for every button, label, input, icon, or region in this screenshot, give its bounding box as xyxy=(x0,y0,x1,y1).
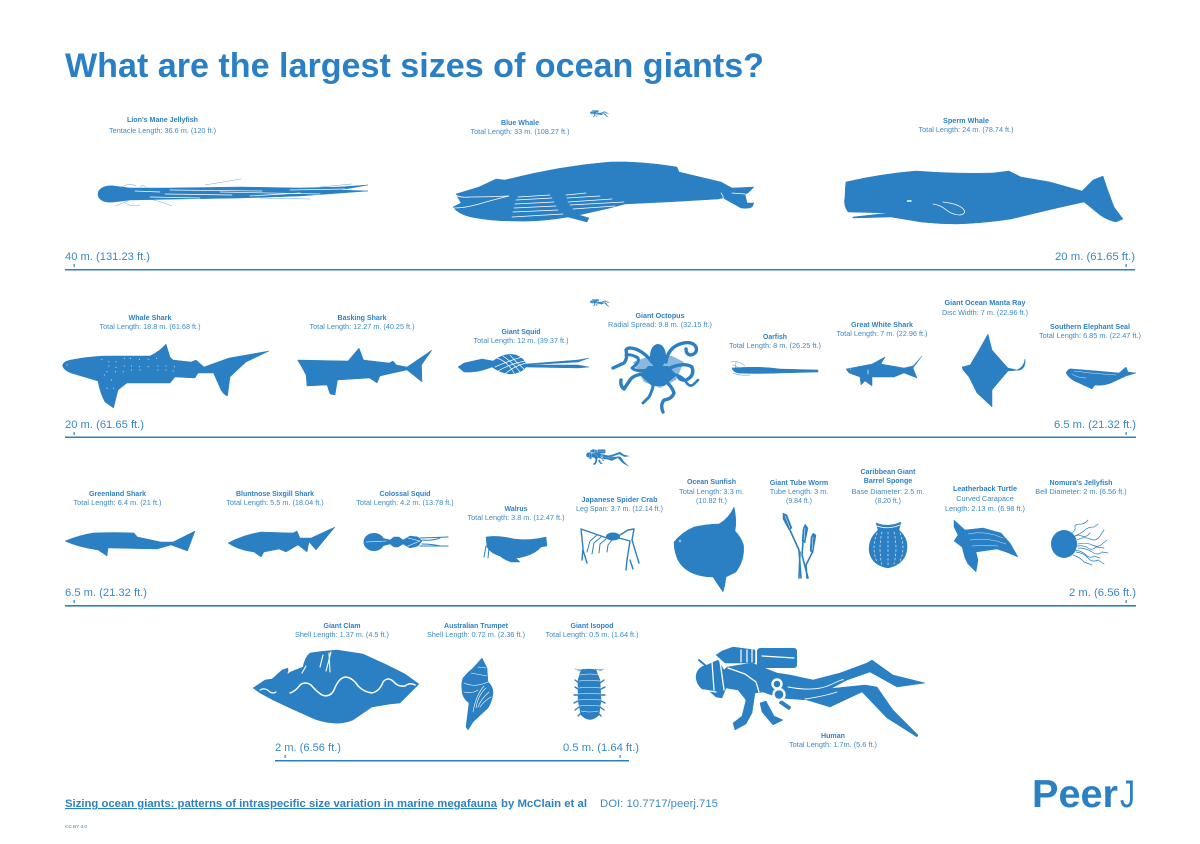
icon: australian trumpet shell xyxy=(462,658,493,730)
citation xyxy=(65,798,718,810)
icon: barrel sponge xyxy=(869,522,907,568)
icon: small diver scale, row 1 xyxy=(590,110,609,118)
label: Walrus xyxy=(504,504,528,513)
label xyxy=(474,327,568,345)
panel: Blue Whale xyxy=(453,118,754,222)
label: Total Length: 0.5 m. (1.64 ft.) xyxy=(546,630,638,639)
label xyxy=(226,489,324,507)
panel: row 2 scale bar xyxy=(65,419,1136,438)
label: Total Length: 5.5 m. (18.04 ft.) xyxy=(226,498,324,507)
panel: row 3 scale bar xyxy=(65,587,1136,607)
panel: Giant Isopod xyxy=(546,621,638,720)
panel: Whale Shark xyxy=(62,313,269,408)
panel: Caribbean Giant Barrel Sponge xyxy=(852,467,924,568)
label: Total Length: 4.2 m. (13.78 ft.) xyxy=(356,498,454,507)
label xyxy=(1035,478,1127,496)
title: What are the largest sizes of ocean giants? xyxy=(65,47,764,85)
label: Giant Ocean Manta Ray xyxy=(944,298,1026,307)
icon: giant isopod xyxy=(574,669,605,720)
icon: blue whale xyxy=(453,162,754,222)
label: Total Length: 6.85 m. (22.47 ft.) xyxy=(1039,331,1141,340)
panel: Leatherback Turtle xyxy=(945,484,1025,572)
label: Radial Spread: 9.8 m. (32.15 ft.) xyxy=(608,320,712,329)
icon: giant squid xyxy=(458,354,589,374)
label xyxy=(679,477,744,505)
label xyxy=(852,467,924,505)
label: Shell Length: 0.72 m. (2.36 ft.) xyxy=(427,630,525,639)
scale rule xyxy=(275,755,629,762)
label: Barrel Sponge xyxy=(864,476,912,485)
label: Total Length: 8 m. (26.25 ft.) xyxy=(729,341,821,350)
license note: CC BY 4.0 xyxy=(65,824,88,829)
label xyxy=(942,298,1028,317)
scale label: 20 m: 20 m. (61.65 ft.) xyxy=(1055,251,1135,263)
label xyxy=(295,621,389,639)
icon: manta ray xyxy=(962,334,1025,407)
label: Giant Tube Worm xyxy=(770,478,828,487)
citation: DOI: 10.7717/peerj.715 xyxy=(600,798,718,810)
label: Basking Shark xyxy=(338,313,386,322)
label: Giant Octopus xyxy=(636,311,684,320)
panel: Nomura's Jellyfish xyxy=(1035,478,1127,565)
label: Giant Squid xyxy=(502,327,540,336)
citation: Sizing ocean giants: patterns of intraspecific size variation in marine megafauna xyxy=(65,798,498,810)
label: Sperm Whale xyxy=(943,116,989,125)
label: Colossal Squid xyxy=(380,489,430,498)
logo: PeerJ: J xyxy=(1120,773,1135,816)
label xyxy=(74,489,162,507)
icon: leatherback turtle xyxy=(954,520,1018,572)
label: Giant Isopod xyxy=(570,621,614,630)
label: Base Diameter: 2.5 m. xyxy=(852,487,924,496)
panel: Oarfish xyxy=(729,332,821,375)
icon: lion's mane jellyfish xyxy=(98,179,368,206)
logo: PeerJ: Peer xyxy=(1032,773,1118,816)
label: Total Length: 12.27 m. (40.25 ft.) xyxy=(310,322,414,331)
label xyxy=(945,484,1025,513)
label: (8.20 ft.) xyxy=(875,496,901,505)
panel: Human diver xyxy=(696,647,925,749)
scale label: 40 m: 40 m. (131.23 ft.) xyxy=(65,251,150,263)
label: Blue Whale xyxy=(501,118,539,127)
icon: ocean sunfish xyxy=(674,507,744,592)
scale rule xyxy=(65,264,1135,270)
citation: by McClain et al xyxy=(501,798,587,810)
scale label: 6.5 m: 6.5 m. (21.32 ft.) xyxy=(65,587,147,599)
icon: great white shark xyxy=(846,356,922,386)
label xyxy=(109,115,216,135)
icon: elephant seal xyxy=(1066,367,1136,389)
label: Total Length: 1.7m. (5.6 ft.) xyxy=(789,740,877,749)
label: Leg Span: 3.7 m. (12.14 ft.) xyxy=(576,504,663,513)
label: Shell Length: 1.37 m. (4.5 ft.) xyxy=(295,630,389,639)
label xyxy=(608,311,712,329)
panel: Giant Ocean Manta Ray xyxy=(942,298,1028,407)
label: Great White Shark xyxy=(851,320,913,329)
scale label: 20 m: 20 m. (61.65 ft.) xyxy=(65,419,144,431)
icon: walrus xyxy=(484,536,547,562)
panel: Giant Tube Worm xyxy=(770,478,828,578)
label: Total Length: 24 m. (78.74 ft.) xyxy=(918,125,1014,134)
panel: Giant Clam xyxy=(253,621,419,723)
label: Bluntnose Sixgill Shark xyxy=(236,489,314,498)
icon: whale shark xyxy=(62,344,269,408)
scale label: 2 m: 2 m. (6.56 ft.) xyxy=(1069,587,1136,599)
label: Total Length: 3.8 m. (12.47 ft.) xyxy=(468,513,564,522)
panel: row 4 scale bar xyxy=(275,742,639,762)
label xyxy=(918,116,1014,134)
label: Giant Clam xyxy=(324,621,360,630)
scale label: 0.5 m: 0.5 m. (1.64 ft.) xyxy=(563,742,639,754)
label: Total Length: 18.8 m. (61.68 ft.) xyxy=(100,322,200,331)
icon: nomura's jellyfish xyxy=(1051,520,1108,565)
label xyxy=(729,332,821,350)
label: Leatherback Turtle xyxy=(953,484,1017,493)
panel: row 1 scale bar xyxy=(65,251,1135,270)
panel: Ocean Sunfish xyxy=(674,477,744,592)
label: Total Length: 7 m. (22.96 ft.) xyxy=(836,329,928,338)
panel: Giant Octopus xyxy=(608,311,712,412)
panel: Greenland Shark xyxy=(65,489,195,556)
label: Australian Trumpet xyxy=(444,621,509,630)
label: Total Length: 6.4 m. (21 ft.) xyxy=(74,498,162,507)
icon: greenland shark xyxy=(65,531,195,556)
icon: scuba diver xyxy=(696,647,925,737)
icon: sperm whale xyxy=(844,171,1123,224)
label: Nomura's Jellyfish xyxy=(1050,478,1112,487)
label xyxy=(789,731,877,749)
label: Tentacle Length: 36.6 m. (120 ft.) xyxy=(109,126,216,135)
label: (10.82 ft.) xyxy=(696,496,727,505)
icon: spider crab xyxy=(581,529,639,570)
label: Oarfish xyxy=(763,332,787,341)
icon: tube worms xyxy=(783,513,816,578)
label: Total Length: 33 m. (108.27 ft.) xyxy=(470,127,570,136)
label: Length: 2.13 m. (6.98 ft.) xyxy=(945,504,1025,513)
label: Ocean Sunfish xyxy=(687,477,736,486)
label: Total Length: 3.3 m. xyxy=(679,487,744,496)
label xyxy=(310,313,414,331)
panel: Giant Squid xyxy=(458,327,589,374)
panel: Australian Trumpet xyxy=(427,621,525,730)
label: Whale Shark xyxy=(128,313,172,322)
label xyxy=(100,313,200,331)
label xyxy=(356,489,454,507)
icon: basking shark xyxy=(298,348,432,395)
label: Greenland Shark xyxy=(89,489,146,498)
label: Southern Elephant Seal xyxy=(1050,322,1130,331)
label xyxy=(770,478,828,505)
icon: colossal squid xyxy=(364,533,448,551)
label xyxy=(470,118,570,136)
label xyxy=(546,621,638,639)
label: Tube Length: 3 m. xyxy=(770,487,828,496)
label: Caribbean Giant xyxy=(860,467,916,476)
label xyxy=(836,320,928,338)
panel: Japanese Spider Crab xyxy=(576,495,663,570)
scale label: 6.5 m: 6.5 m. (21.32 ft.) xyxy=(1054,419,1136,431)
label: Disc Width: 7 m. (22.96 ft.) xyxy=(942,308,1028,317)
label: Curved Carapace xyxy=(956,494,1014,503)
label: Bell Diameter: 2 m. (6.56 ft.) xyxy=(1035,487,1127,496)
label xyxy=(427,621,525,639)
panel: Southern Elephant Seal xyxy=(1039,322,1141,389)
icon: giant clam xyxy=(253,650,419,723)
label xyxy=(468,504,564,522)
icon: sixgill shark xyxy=(228,527,335,557)
label: Human xyxy=(821,731,845,740)
scale label: 2 m: 2 m. (6.56 ft.) xyxy=(275,742,341,754)
panel: Bluntnose Sixgill Shark xyxy=(226,489,335,557)
panel: Walrus xyxy=(468,504,564,562)
panel: Basking Shark xyxy=(298,313,432,395)
icon: small diver scale, row 3 xyxy=(586,449,630,466)
icon: oarfish xyxy=(731,362,818,375)
label: (9.84 ft.) xyxy=(786,496,812,505)
panel: Great White Shark xyxy=(836,320,928,386)
label: Total Length: 12 m. (39.37 ft.) xyxy=(474,336,568,345)
panel: Sperm Whale xyxy=(844,116,1123,224)
panel: Colossal Squid xyxy=(356,489,454,551)
label xyxy=(576,495,663,513)
scale rule xyxy=(65,600,1136,607)
icon: small diver scale, row 2 xyxy=(590,299,610,307)
icon: giant octopus xyxy=(613,343,698,412)
scale rule xyxy=(65,432,1136,438)
label xyxy=(1039,322,1141,340)
label: Japanese Spider Crab xyxy=(582,495,658,504)
label: Lion's Mane Jellyfish xyxy=(127,115,198,124)
panel: Lion's Mane Jellyfish xyxy=(98,115,368,206)
